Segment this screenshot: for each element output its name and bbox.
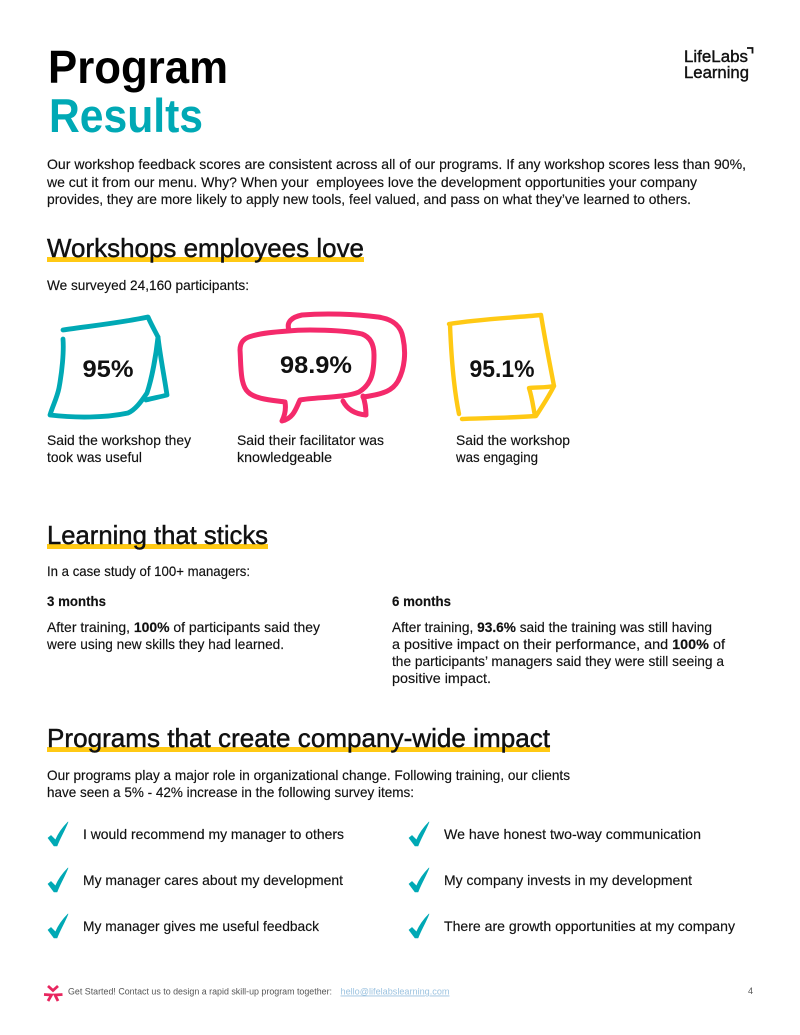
footer: hello@lifelabslearning.com xyxy=(340,986,450,996)
icon: check xyxy=(48,822,68,846)
intro paragraph: provides, they are more likely to apply new tools, feel valued, and pass on what they’ve learned to others. xyxy=(47,191,691,207)
intro paragraph: Our workshop feedback scores are consistent across all of our programs. If any workshop scores less than 90%, xyxy=(47,156,746,172)
intro paragraph xyxy=(46,156,746,207)
column: 6 months: a positive impact on their performance, and 100% of xyxy=(392,636,725,652)
icon: check xyxy=(48,914,68,938)
checklist: right: There are growth opportunities at my company xyxy=(444,918,735,934)
logo: Learning xyxy=(684,64,749,82)
section heading: learning: Learning that sticks xyxy=(47,520,268,550)
footer: 4 xyxy=(748,986,753,996)
icon: yellow sticky note xyxy=(449,315,554,419)
programs intro xyxy=(47,767,570,800)
icon: check xyxy=(409,868,429,892)
checklist: left: My manager gives me useful feedback xyxy=(83,918,320,934)
programs intro: Our programs play a major role in organizational change. Following training, our clients xyxy=(47,767,570,783)
checklist: left: My manager cares about my development xyxy=(83,872,343,888)
column: 3 months xyxy=(46,593,320,652)
caption: Said the workshop they xyxy=(47,432,191,448)
intro paragraph: we cut it from our menu. Why? When your employees love the development opportunities your company xyxy=(46,174,697,190)
column: 3 months: 3 months xyxy=(47,593,106,609)
column: 6 months xyxy=(392,593,725,686)
icon: check xyxy=(409,822,429,846)
section heading: workshops: Workshops employees love xyxy=(47,233,364,263)
title: Program xyxy=(48,41,228,93)
checklist: right xyxy=(409,822,735,938)
logo xyxy=(684,48,752,82)
caption xyxy=(47,432,191,465)
stat: useful xyxy=(47,317,191,465)
icon: footer mark xyxy=(44,986,62,1001)
icon: check xyxy=(409,914,429,938)
checklist: left xyxy=(48,822,344,938)
title xyxy=(48,41,228,142)
column: 3 months: were using new skills they had learned. xyxy=(46,636,284,652)
column: 3 months: After training, 100% of participants said they xyxy=(47,619,320,635)
footer xyxy=(44,986,753,1001)
caption: knowledgeable xyxy=(237,449,332,465)
programs intro: have seen a 5% - 42% increase in the following survey items: xyxy=(47,784,414,800)
stat: knowledgeable xyxy=(237,314,405,465)
caption xyxy=(455,432,570,465)
section heading: programs: Programs that create company-wide impact xyxy=(47,723,551,753)
caption: Said the workshop xyxy=(456,432,570,448)
column: 6 months: 6 months xyxy=(392,593,451,609)
survey intro: We surveyed 24,160 participants: xyxy=(47,277,249,293)
icon: check xyxy=(48,868,68,892)
column: 6 months: After training, 93.6% said the training was still having xyxy=(392,619,712,635)
icon: teal note xyxy=(50,317,167,417)
case study intro: In a case study of 100+ managers: xyxy=(47,563,250,579)
checklist: left: I would recommend my manager to others xyxy=(83,826,344,842)
caption: Said their facilitator was xyxy=(237,432,384,448)
logo: LifeLabs xyxy=(684,48,748,66)
stat: engaging xyxy=(449,315,570,465)
icon: pink speech bubbles xyxy=(240,314,405,421)
caption xyxy=(237,432,384,465)
column: 6 months: positive impact. xyxy=(392,670,491,686)
checklist: right: My company invests in my development xyxy=(444,872,692,888)
checklist: right: We have honest two-way communication xyxy=(444,826,701,842)
footer: Get Started! Contact us to design a rapid skill-up program together: xyxy=(68,986,332,996)
caption: took was useful xyxy=(47,449,142,465)
stat: engaging: 95.1% xyxy=(470,356,534,383)
stat: knowledgeable: 98.9% xyxy=(280,352,352,379)
stat: useful: 95% xyxy=(82,356,134,383)
title: Results xyxy=(49,89,203,142)
column: 6 months: the participants’ managers said they were still seeing a xyxy=(392,653,724,669)
caption: was engaging xyxy=(455,449,538,465)
